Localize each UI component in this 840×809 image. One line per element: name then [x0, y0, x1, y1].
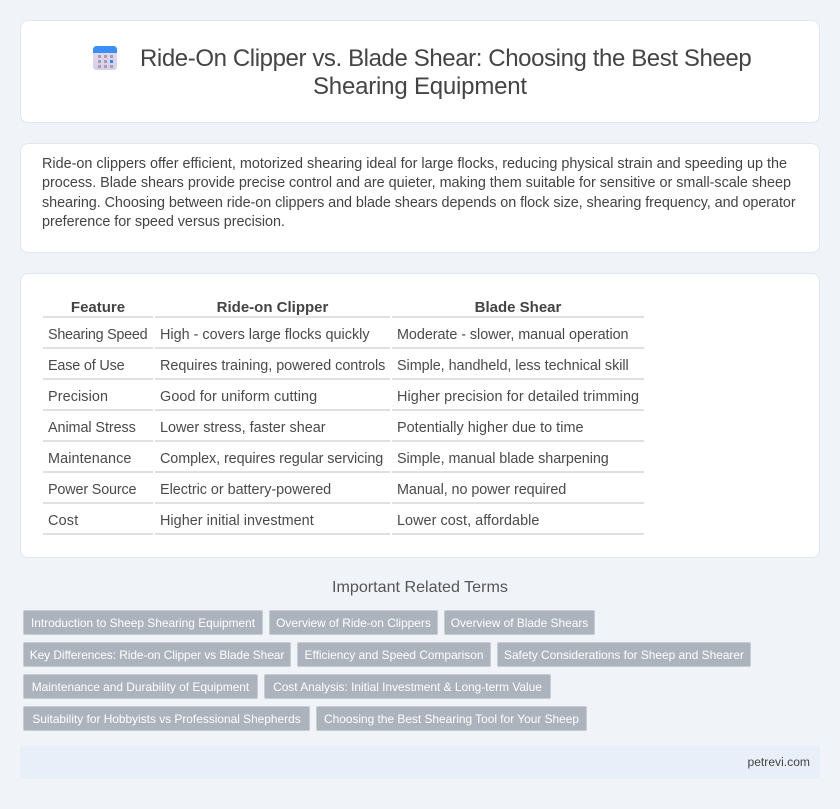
comparison table: High - covers large flocks quickly: [160, 327, 370, 343]
title: Ride-On Clipper vs. Blade Shear: Choosing the Best Sheep: [140, 45, 751, 72]
heading: related terms: Important Related Terms: [332, 578, 508, 596]
related term tags: Overview of Blade Shears: [451, 616, 588, 630]
related term tags: Safety Considerations for Sheep and Shearer: [504, 648, 744, 662]
intro text: preference for speed versus precision.: [42, 214, 285, 230]
comparison table: Lower stress, faster shear: [160, 420, 326, 436]
related term tags: Efficiency and Speed Comparison: [305, 648, 483, 662]
comparison table: [43, 299, 644, 535]
comparison table: Complex, requires regular servicing: [160, 451, 383, 467]
comparison table: Requires training, powered controls: [160, 358, 385, 374]
comparison table: Shearing Speed: [48, 327, 147, 343]
panel: header: [20, 20, 820, 123]
comparison table: Precision: [48, 389, 108, 405]
comparison table: Feature: [71, 299, 125, 316]
comparison table: Simple, manual blade sharpening: [397, 451, 609, 467]
comparison table: Lower cost, affordable: [397, 513, 539, 529]
related term tags: Key Differences: Ride-on Clipper vs Blade Shear: [30, 648, 284, 662]
intro text: Ride-on clippers offer efficient, motorized shearing ideal for large flocks, reducing physical strain and speeding up the: [42, 156, 787, 172]
comparison table: Simple, handheld, less technical skill: [397, 358, 629, 374]
intro text: process. Blade shears provide precise control and are quieter, making them suitable for sensitive or small-scale sheep: [42, 175, 791, 191]
comparison table: Blade Shear: [475, 299, 561, 316]
related term tags: Choosing the Best Shearing Tool for Your Sheep: [324, 712, 579, 726]
related term tags: Cost Analysis: Initial Investment & Long-term Value: [273, 680, 542, 694]
related term tags: Suitability for Hobbyists vs Professional Shepherds: [32, 712, 301, 726]
related term tags: [23, 610, 751, 731]
comparison table: Potentially higher due to time: [397, 420, 584, 436]
comparison table: Electric or battery-powered: [160, 482, 331, 498]
related term tags: Introduction to Sheep Shearing Equipment: [31, 616, 255, 630]
comparison table: Ease of Use: [48, 358, 124, 374]
comparison table: Cost: [48, 513, 78, 529]
comparison table: Higher initial investment: [160, 513, 314, 529]
intro text: shearing. Choosing between ride-on clippers and blade shears depends on flock size, shearing frequency, and operator: [42, 195, 796, 211]
comparison table: Ride-on Clipper: [217, 299, 328, 316]
icon: calendar: [93, 46, 117, 70]
intro text: [42, 156, 796, 230]
title: Shearing Equipment: [313, 73, 527, 100]
footer source: petrevi.com: [747, 755, 810, 769]
title: [140, 45, 751, 100]
comparison table: Manual, no power required: [397, 482, 566, 498]
comparison table: Power Source: [48, 482, 136, 498]
footer bar: [20, 745, 820, 779]
comparison table: Maintenance: [48, 451, 132, 467]
panel: comparison table: [20, 273, 820, 558]
comparison table: Animal Stress: [48, 420, 136, 436]
related term tags: Maintenance and Durability of Equipment: [32, 680, 249, 694]
comparison table: Good for uniform cutting: [160, 389, 317, 405]
comparison table: Moderate - slower, manual operation: [397, 327, 628, 343]
comparison table: Higher precision for detailed trimming: [397, 389, 639, 405]
panel: intro: [20, 143, 820, 253]
related term tags: Overview of Ride-on Clippers: [276, 616, 431, 630]
